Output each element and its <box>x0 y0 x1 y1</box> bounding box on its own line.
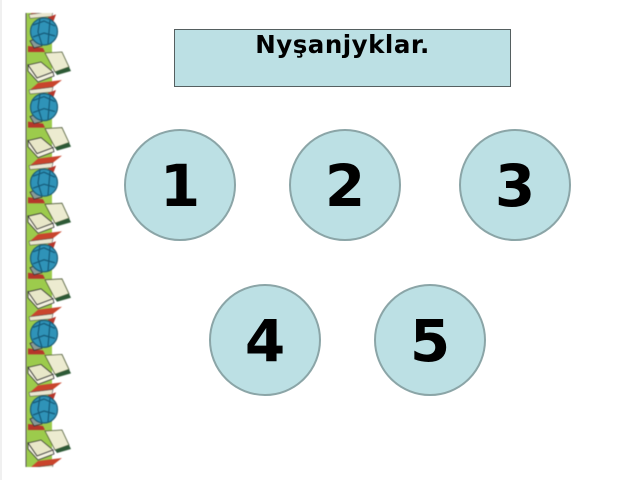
circle 1 <box>124 129 236 241</box>
circle 5: 5 <box>410 307 450 375</box>
decorative border: globes and books strip <box>24 12 72 468</box>
circle 5 <box>374 284 486 396</box>
title box <box>174 29 511 87</box>
circle 4 <box>209 284 321 396</box>
circle 3 <box>459 129 571 241</box>
title box: Nyşanjyklar. <box>255 30 430 59</box>
circle 1: 1 <box>160 152 200 220</box>
circle 2 <box>289 129 401 241</box>
circle 2: 2 <box>325 152 365 220</box>
circle 4: 4 <box>245 307 285 375</box>
circle 3: 3 <box>495 152 535 220</box>
